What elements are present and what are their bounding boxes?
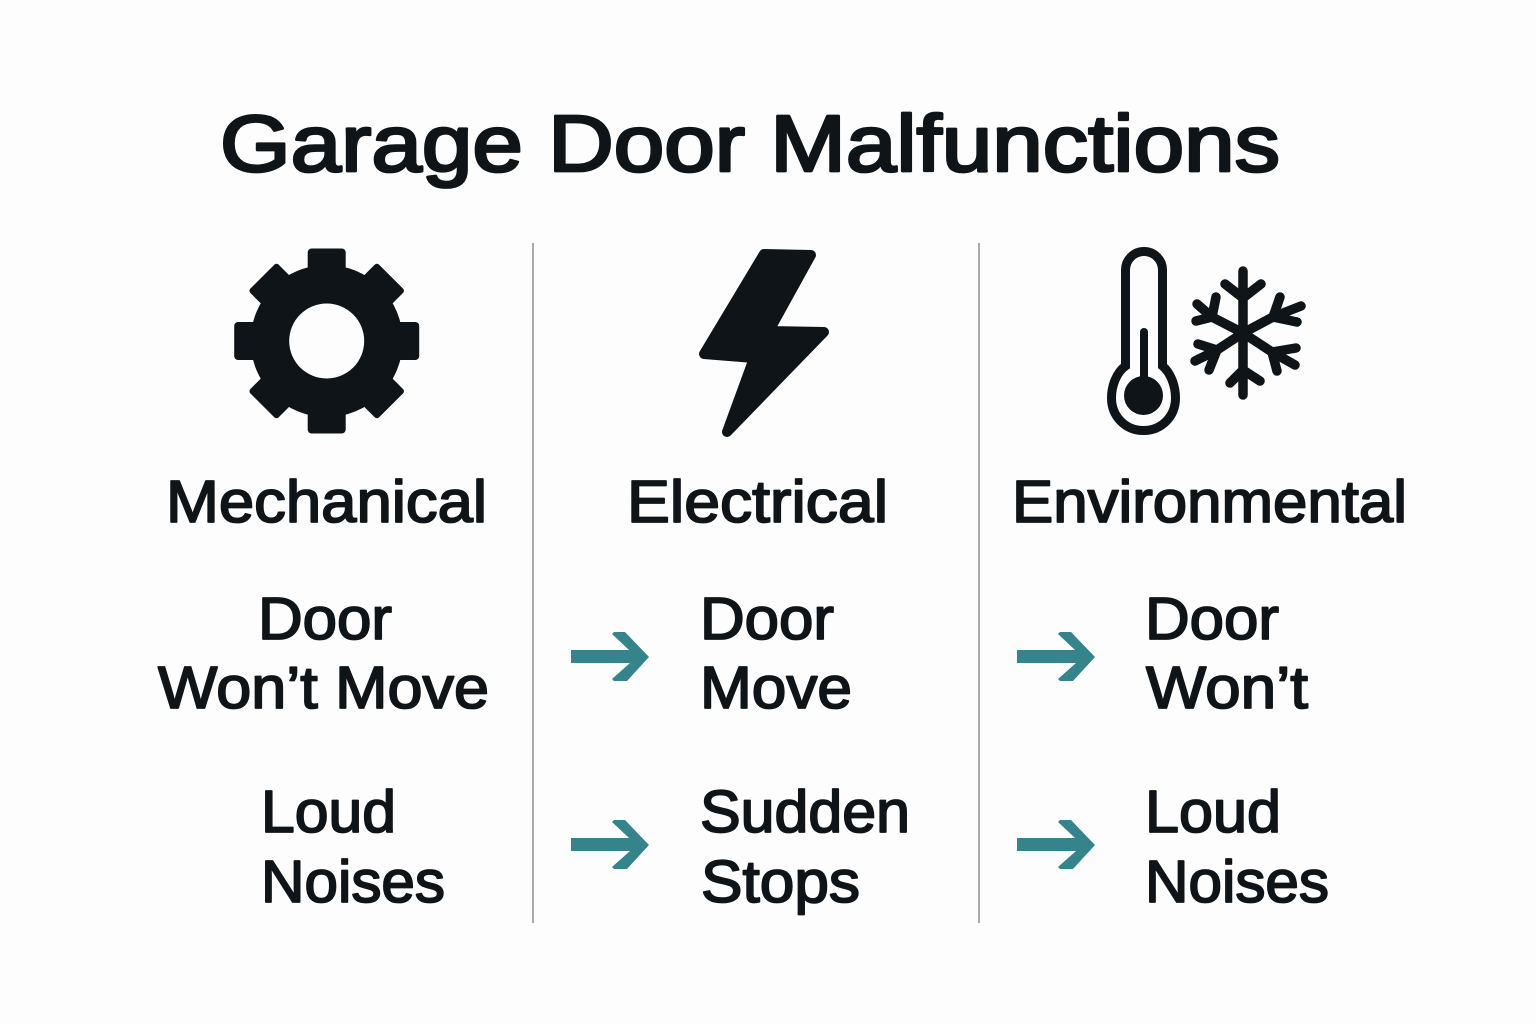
symptom: Loud Noises: Noises <box>1145 849 1329 915</box>
symptom: Loud Noises: Loud <box>1145 779 1281 845</box>
panel: mechanical <box>158 248 489 915</box>
symptom: Door Won't <box>1145 586 1308 721</box>
heading: Environmental: Environmental <box>1012 469 1407 535</box>
symptom: Loud Noises <box>261 779 445 915</box>
title: Garage Door Malfunctions <box>220 99 1280 188</box>
heading: Electrical: Electrical <box>627 469 888 535</box>
symptom: Sudden Stops <box>700 779 910 915</box>
symptom: Door Move: Move <box>700 655 852 721</box>
symptom: Door Move: Door <box>700 586 834 652</box>
symptom: Door Won't Move: Won’t Move <box>158 655 489 721</box>
symptom: Loud Noises: Noises <box>261 849 445 915</box>
arrow: row 2 <box>571 820 649 869</box>
symptom: Door Won't: Door <box>1145 586 1279 652</box>
icon: snowflake <box>1195 271 1301 395</box>
symptom: Sudden Stops: Sudden <box>700 779 910 845</box>
arrow: row 1 <box>1017 632 1095 681</box>
symptom: Door Won't Move: Door <box>258 586 392 652</box>
icon: gear <box>234 248 419 434</box>
heading: Mechanical: Mechanical <box>166 469 487 535</box>
panel: electrical <box>571 254 910 915</box>
symptom: Door Won't: Won’t <box>1146 655 1308 721</box>
symptom: Loud Noises: Loud <box>261 779 396 845</box>
symptom: Sudden Stops: Stops <box>701 849 860 915</box>
symptom: Loud Noises <box>1145 779 1329 915</box>
arrow: row 2 <box>1017 820 1095 869</box>
symptom: Door Move <box>700 586 852 721</box>
icon: lightning bolt <box>704 254 824 432</box>
arrow: row 1 <box>571 632 649 681</box>
symptom: Door Won't Move <box>158 586 489 721</box>
icon: thermometer <box>1112 252 1176 430</box>
panel: environmental <box>1012 252 1407 915</box>
